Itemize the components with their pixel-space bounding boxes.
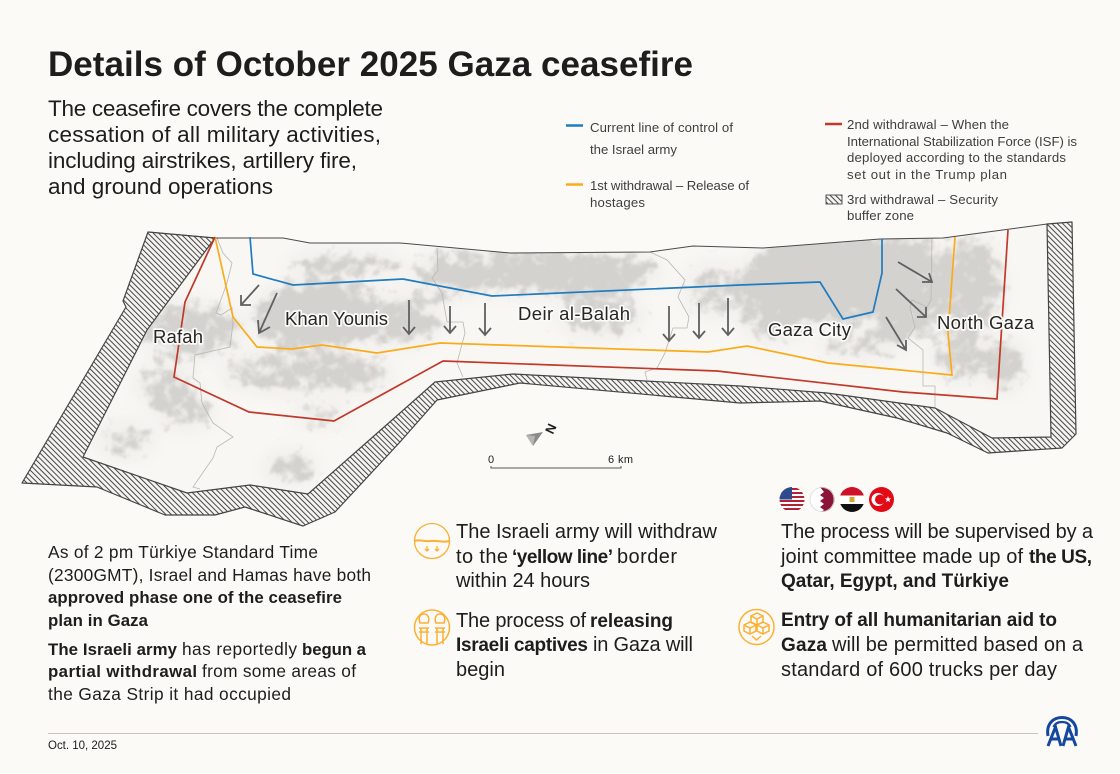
intro text block: including airstrikes, artillery fire, (48, 148, 357, 173)
label: Gaza City: Gaza City (768, 319, 852, 340)
left text block: from some areas of (202, 661, 356, 681)
date: Oct. 10, 2025 (48, 740, 117, 752)
supervision text: the US, (1029, 547, 1092, 568)
legend: first withdrawal: hostages (590, 195, 645, 210)
label: Khan Younis: Khan Younis (285, 308, 388, 329)
flag: United States (779, 487, 805, 513)
left text block (48, 542, 371, 704)
AA logo (1048, 718, 1076, 746)
captives text: begin (456, 659, 505, 681)
legend (566, 117, 1077, 223)
supervision text: The process will be supervised by a (781, 521, 1094, 543)
label: Rafah: Rafah (153, 326, 203, 347)
first withdrawal line (yellow) (215, 237, 955, 375)
aid text: Entry of all humanitarian aid to (781, 610, 1057, 631)
north arrow: N (542, 421, 560, 436)
withdrawal text: within 24 hours (455, 570, 590, 592)
left text block: begun a (302, 640, 367, 659)
north arrow (526, 421, 560, 446)
land top edge (148, 224, 1047, 253)
scale bar (488, 454, 633, 468)
intro text block: and ground operations (48, 174, 273, 199)
governorate boundaries (193, 238, 935, 489)
aid text (781, 610, 1084, 681)
flag: Qatar (809, 487, 835, 513)
legend: current line of control (566, 120, 733, 157)
icon: yellow line withdrawal (414, 524, 450, 558)
legend: second withdrawal: set out in the Trump plan (847, 167, 1007, 182)
aid text: Gaza (781, 635, 827, 656)
left text block: approved phase one of the ceasefire (48, 588, 342, 607)
current line of control (blue) (250, 237, 882, 319)
left text block: (2300GMT), Israel and Hamas have both (48, 565, 371, 585)
captives text: in Gaza will (593, 634, 693, 656)
captives text: Israeli captives (456, 635, 588, 656)
legend: third withdrawal buffer zone: buffer zone (847, 208, 914, 223)
legend: current line of control: the Israel army (590, 142, 677, 157)
left text block: The Israeli army (48, 640, 178, 659)
legend: second withdrawal: deployed according to the standards (847, 150, 1066, 165)
scale bar: 0 (488, 454, 494, 466)
title: Details of October 2025 Gaza ceasefire (48, 45, 693, 84)
legend: first withdrawal: 1st withdrawal – Release of (590, 178, 749, 193)
withdrawal text: border (617, 546, 677, 568)
captives text: releasing (590, 611, 673, 632)
withdrawal text: ‘yellow line’ (512, 547, 613, 568)
supervision text (780, 521, 1094, 592)
supervision text: joint committee made up of (780, 546, 1023, 568)
intro text block: The ceasefire covers the complete (48, 96, 383, 121)
left text block: the Gaza Strip it had occupied (48, 684, 291, 704)
withdrawal text: to the (456, 546, 508, 568)
icon: released captives hands (414, 610, 450, 645)
legend: first withdrawal (566, 178, 749, 210)
label: Deir al-Balah: Deir al-Balah (518, 303, 630, 324)
left text block: has reportedly (182, 639, 297, 659)
urban built-up areas (95, 230, 1025, 484)
left text block: partial withdrawal (48, 662, 197, 681)
legend: second withdrawal: 2nd withdrawal – When the (847, 117, 1009, 132)
left text block: plan in Gaza (48, 611, 149, 630)
label: North Gaza: North Gaza (937, 312, 1035, 333)
aid text: will be permitted based on a (831, 634, 1084, 656)
footer divider (48, 732, 1038, 734)
legend: third withdrawal buffer zone: 3rd withdrawal – Security (847, 192, 998, 207)
captives text: The process of (456, 610, 586, 632)
aid text: standard of 600 trucks per day (781, 659, 1057, 681)
intro text block (48, 96, 383, 199)
flag: Egypt (839, 487, 865, 513)
intro text block: cessation of all military activities, (48, 122, 381, 147)
legend: second withdrawal (825, 117, 1077, 182)
left text block: As of 2 pm Türkiye Standard Time (48, 542, 318, 562)
supervision text: Qatar, Egypt, and Türkiye (781, 571, 1009, 592)
withdrawal text (455, 521, 718, 592)
map of Gaza Strip (22, 222, 1076, 526)
legend: current line of control: Current line of control of (590, 120, 733, 135)
withdrawal text: The Israeli army will withdraw (456, 521, 718, 543)
land area (83, 224, 1051, 494)
flags (779, 487, 894, 513)
legend: third withdrawal buffer zone (826, 192, 998, 223)
hatched security buffer zone (22, 222, 1076, 526)
flag: Turkiye (869, 487, 894, 512)
captives text (456, 610, 693, 681)
icon: humanitarian aid boxes (739, 610, 774, 644)
withdrawal direction arrows (241, 262, 932, 350)
second withdrawal line (red) (174, 230, 1008, 421)
scale bar: 6 km (608, 454, 633, 466)
legend: second withdrawal: International Stabilization Force (ISF) is (847, 134, 1077, 149)
